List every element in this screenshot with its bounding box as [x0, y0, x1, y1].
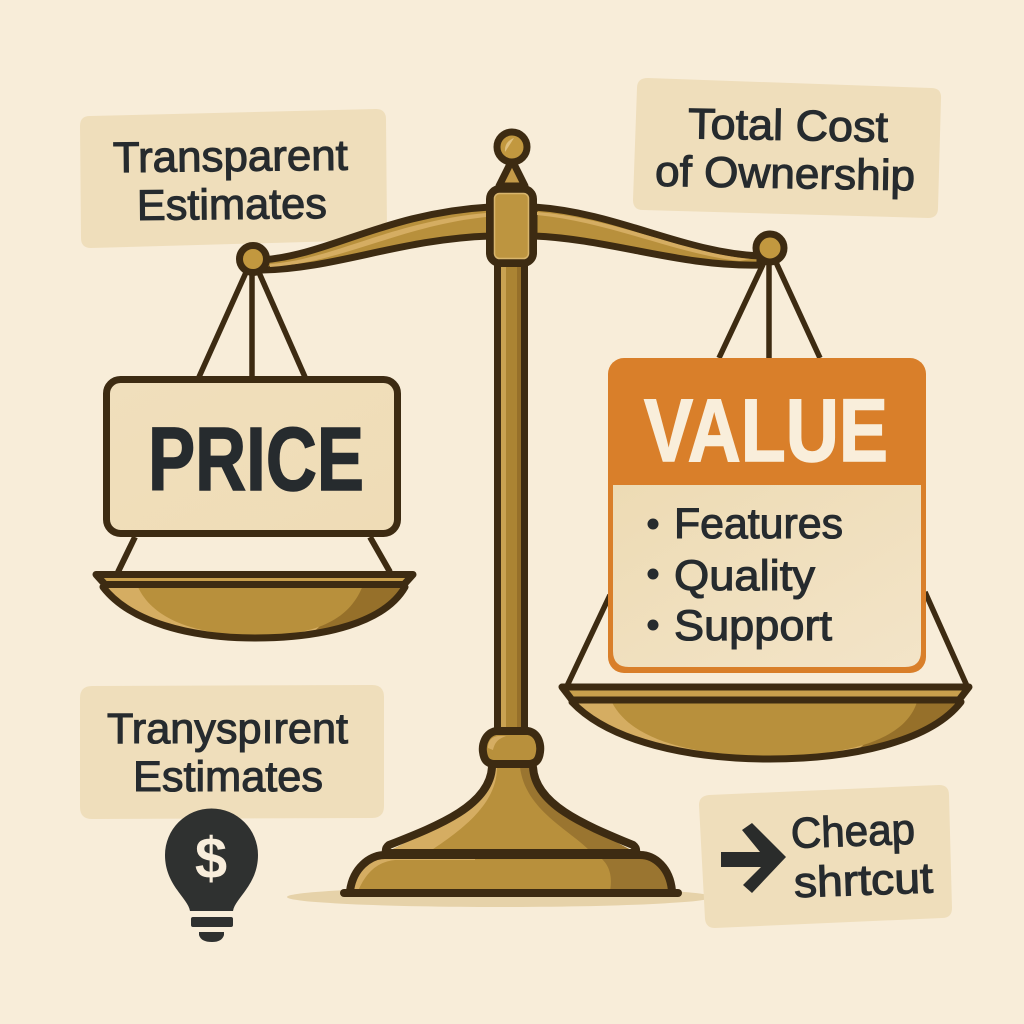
icon: light bulb with dollar sign — [165, 808, 258, 942]
label: Total Cost of Ownership — [633, 78, 941, 218]
left pan straps — [118, 537, 390, 572]
price text: PRICE — [148, 410, 364, 510]
right pivot — [756, 234, 784, 262]
value list: Quality — [674, 552, 816, 600]
label: Transparent Estimates: Transparent — [113, 132, 348, 182]
left pivot — [240, 246, 266, 272]
label: Cheap shortcut with arrow: Cheap — [790, 806, 916, 858]
value list — [648, 500, 843, 650]
value heading: VALUE — [644, 380, 888, 480]
left hanging strings — [199, 268, 305, 377]
icon: light bulb with dollar sign: $ — [195, 826, 227, 891]
label: Cheap shortcut with arrow — [699, 785, 952, 928]
label: Tranyspirent Estimates: Tranyspırent — [107, 705, 348, 753]
price card — [106, 380, 398, 534]
right pan — [560, 592, 975, 765]
center block — [490, 189, 533, 263]
post — [498, 262, 524, 732]
scale stand — [340, 262, 682, 897]
icon: arrow — [721, 823, 786, 893]
label: Tranyspirent Estimates: Estimates — [133, 753, 323, 801]
label: Total Cost of Ownership: of Ownership — [655, 148, 915, 200]
left pan — [95, 537, 415, 645]
top knob — [497, 132, 527, 186]
right pan straps — [567, 592, 967, 686]
value list: Support — [674, 602, 832, 650]
label: Cheap shortcut with arrow: shrtcut — [793, 854, 934, 907]
collar — [483, 731, 540, 764]
bell base — [385, 767, 640, 853]
right hanging strings — [719, 258, 820, 358]
balance beam — [262, 207, 760, 270]
value list: Features — [674, 500, 843, 548]
label: Total Cost of Ownership: Total Cost — [688, 100, 889, 152]
value card — [608, 358, 926, 673]
label: Transparent Estimates: Estimates — [137, 180, 327, 230]
ground shadow — [287, 887, 713, 907]
label: Transparent Estimates — [80, 109, 387, 248]
foot of base — [340, 855, 682, 897]
label: Tranyspirent Estimates — [80, 685, 384, 819]
